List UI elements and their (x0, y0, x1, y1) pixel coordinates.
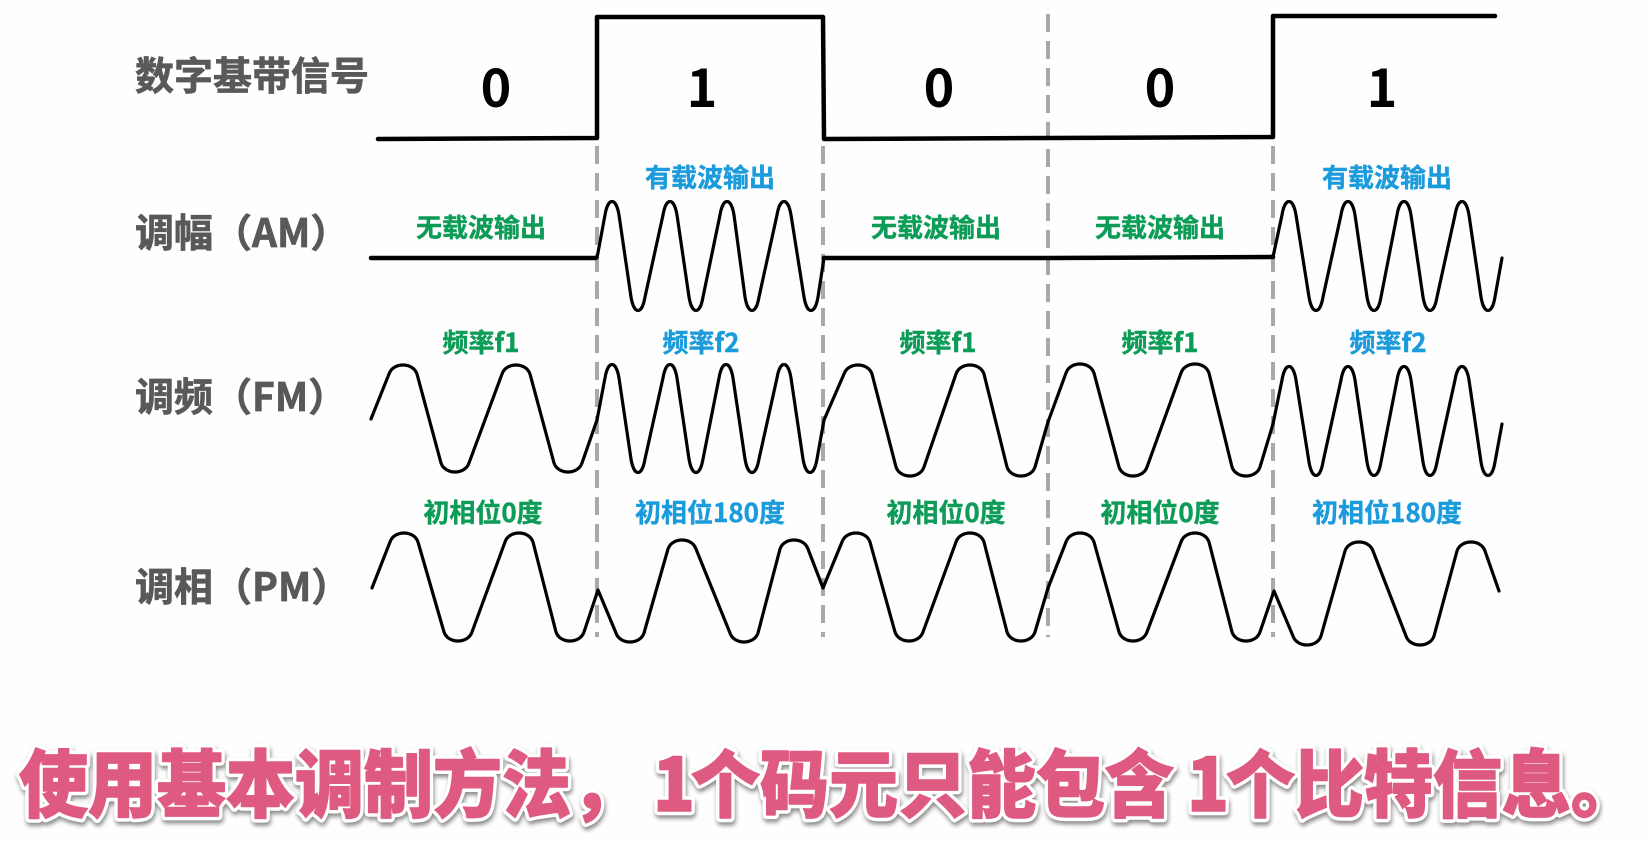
caption: conclusion in pink outlined text: 使用基本调制方法， (19, 728, 640, 833)
chart: frequency modulated wave (371, 364, 1502, 476)
bit values 0 1 0 0 1: 1 (687, 47, 717, 122)
row label: AM: 调幅（AM） (135, 203, 349, 259)
caption: conclusion in pink outlined text: 1 (1187, 728, 1229, 833)
AM labels (416, 158, 1452, 245)
caption: conclusion in pink outlined text: 1 (653, 728, 695, 833)
bit values 0 1 0 0 1 (481, 47, 1397, 122)
FM labels: 频率f1 (899, 323, 977, 360)
AM labels: 无载波输出 (871, 208, 1001, 245)
chart: phase modulated wave (372, 533, 1499, 645)
caption: conclusion in pink outlined text: 个比特信息。 (1226, 728, 1640, 833)
caption: conclusion in pink outlined text: 个码元只能包含 (691, 728, 1174, 833)
FM labels: 频率f1 (442, 323, 520, 360)
FM labels (442, 323, 1427, 360)
AM labels: 无载波输出 (416, 208, 546, 245)
caption: conclusion in pink outlined text: 个比特信息。 (1226, 728, 1640, 833)
chart: digital baseband square wave (378, 16, 1495, 139)
row label: FM: 调频（FM） (135, 367, 347, 423)
dashed symbol boundary lines (597, 14, 1273, 637)
PM labels: 初相位180度 (635, 493, 785, 530)
bit values 0 1 0 0 1: 1 (1367, 47, 1397, 122)
chart: amplitude modulated wave (371, 202, 1502, 310)
PM labels: 初相位0度 (886, 493, 1006, 530)
PM labels: 初相位0度 (423, 493, 543, 530)
bit values 0 1 0 0 1: 0 (481, 47, 511, 122)
AM labels: 有载波输出 (645, 158, 775, 195)
caption: conclusion in pink outlined text: 1 (653, 728, 695, 833)
caption: conclusion in pink outlined text: 使用基本调制方法， (19, 728, 640, 833)
PM labels (423, 493, 1462, 530)
caption: conclusion in pink outlined text: 个码元只能包含 (691, 728, 1174, 833)
AM labels: 无载波输出 (1095, 208, 1225, 245)
caption: conclusion in pink outlined text: 1 (1187, 728, 1229, 833)
row label: PM: 调相（PM） (135, 557, 350, 613)
caption: conclusion in pink outlined text (19, 728, 1640, 833)
PM labels: 初相位180度 (1312, 493, 1462, 530)
FM labels: 频率f1 (1121, 323, 1199, 360)
PM labels: 初相位0度 (1100, 493, 1220, 530)
bit values 0 1 0 0 1: 0 (924, 47, 954, 122)
FM labels: 频率f2 (1349, 323, 1427, 360)
FM labels: 频率f2 (662, 323, 740, 360)
row label: digital baseband signal: 数字基带信号 (135, 46, 369, 102)
AM labels: 有载波输出 (1322, 158, 1452, 195)
bit values 0 1 0 0 1: 0 (1145, 47, 1175, 122)
